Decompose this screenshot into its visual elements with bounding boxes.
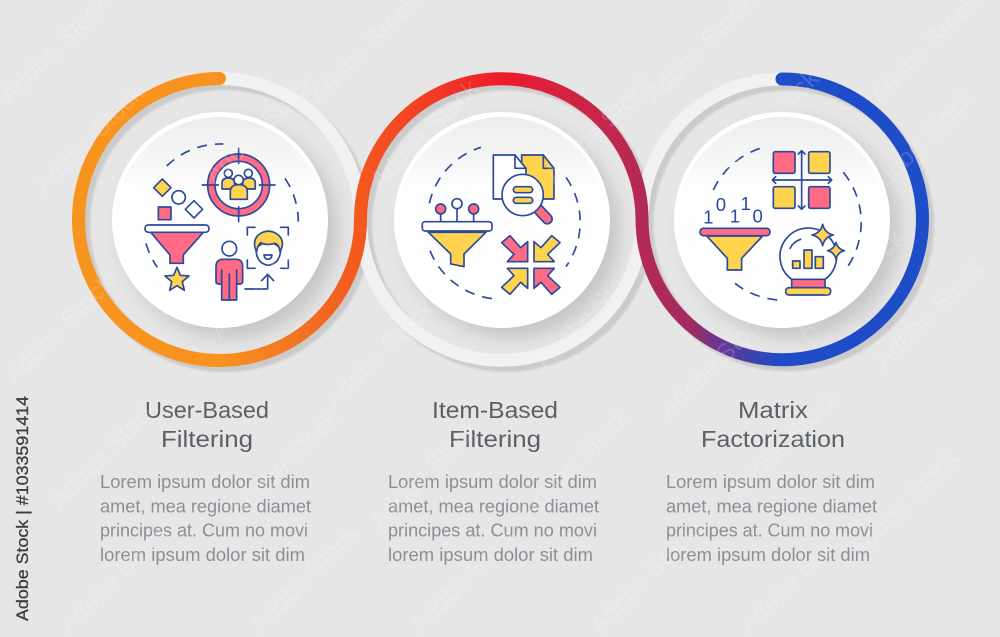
watermarks: Adobe Stock	[584, 519, 705, 637]
disc 1	[112, 112, 338, 338]
pale ring tracks	[220, 78, 782, 360]
heading: user-based filtering: Filtering	[161, 426, 253, 452]
text column 1	[100, 397, 311, 565]
watermarks: Adobe Stock	[529, 254, 650, 374]
watermarks: Adobe Stock	[44, 394, 165, 514]
watermarks: Adobe Stock	[704, 64, 825, 184]
icon: funnel with binary digits: 1	[730, 206, 740, 227]
watermarks: Adobe Stock	[844, 444, 965, 564]
watermarks: Adobe Stock	[54, 519, 175, 637]
watermarks: Adobe Stock	[29, 79, 150, 199]
body text 2: lorem ipsum dolor sit dim	[388, 545, 593, 565]
body text 1: principes at. Cum no movi	[100, 520, 308, 540]
body text 2: Lorem ipsum dolor sit dim	[388, 472, 597, 492]
icon: four converging arrows	[502, 236, 560, 294]
watermarks: Adobe Stock	[869, 254, 990, 374]
watermarks: Adobe Stock	[244, 519, 365, 637]
watermarks: Adobe Stock	[204, 224, 325, 344]
icon: crystal ball chart	[780, 224, 844, 295]
heading: item-based filtering	[432, 397, 558, 452]
heading: matrix factorization	[701, 397, 845, 452]
body text 1: amet, mea regione diamet	[100, 496, 311, 516]
body text 2	[388, 472, 599, 565]
disc 3	[674, 112, 900, 338]
ring shadows	[84, 84, 928, 365]
watermarks: Adobe Stock	[654, 304, 775, 424]
body text 3: amet, mea regione diamet	[666, 496, 877, 516]
text column 2	[388, 397, 599, 565]
body text 2: amet, mea regione diamet	[388, 496, 599, 516]
watermarks: Adobe Stock	[789, 224, 910, 344]
icon: funnel with binary digits: 0	[752, 206, 763, 227]
body text 1	[100, 472, 311, 565]
icon: funnel with binary digits: 1	[703, 206, 714, 227]
disc 2	[394, 112, 620, 338]
watermarks: Adobe Stock	[724, 384, 845, 504]
icon: matrix grid with arrows	[772, 151, 832, 209]
heading: user-based filtering: User-Based	[145, 397, 269, 423]
body text 1: Lorem ipsum dolor sit dim	[100, 472, 310, 492]
icon: funnel with binary digits: 0	[716, 194, 726, 215]
watermarks: Adobe Stock	[859, 84, 980, 204]
watermarks: Adobe Stock	[539, 69, 660, 189]
stock id label: Adobe Stock | #1033591414	[13, 396, 32, 621]
icon: user-based filtering	[145, 144, 298, 300]
icon: funnel with binary digits	[700, 193, 770, 270]
gradient connecting ribbon	[78, 78, 923, 360]
watermarks: Adobe Stock	[734, 519, 855, 637]
body text 1: lorem ipsum dolor sit dim	[100, 545, 305, 565]
watermarks: Adobe Stock	[514, 404, 635, 524]
watermarks: Adobe Stock	[364, 414, 485, 534]
icon: item-based filtering	[422, 147, 580, 299]
heading: matrix factorization: Factorization	[701, 426, 845, 452]
body text 3: lorem ipsum dolor sit dim	[666, 545, 870, 565]
icon: funnel with shapes and star	[145, 179, 209, 290]
heading: matrix factorization: Matrix	[738, 397, 809, 423]
body text 3: principes at. Cum no movi	[666, 520, 873, 540]
body text 3: Lorem ipsum dolor sit dim	[666, 472, 875, 492]
icon: funnel with binary digits: 1	[740, 193, 751, 214]
icon: documents and magnifier	[493, 155, 554, 219]
heading: item-based filtering: Filtering	[449, 426, 541, 452]
heading: user-based filtering	[145, 397, 269, 452]
watermarks: Adobe Stock	[404, 519, 525, 637]
watermarks: Adobe Stock	[224, 404, 345, 524]
body text 2: principes at. Cum no movi	[388, 520, 597, 540]
heading: item-based filtering: Item-Based	[432, 397, 558, 423]
watermarks: Adobe Stock	[199, 69, 320, 189]
icon: matrix factorization	[700, 148, 861, 300]
icon: target with people	[202, 148, 275, 222]
watermarks: Adobe Stock	[319, 294, 440, 414]
text column 3	[666, 397, 877, 565]
icon: person with face scan	[216, 227, 288, 300]
watermarks: Adobe Stock	[364, 74, 485, 194]
watermarks: Adobe Stock	[0, 269, 120, 389]
body text 3	[666, 472, 877, 565]
icon: funnel with pins	[422, 199, 492, 267]
